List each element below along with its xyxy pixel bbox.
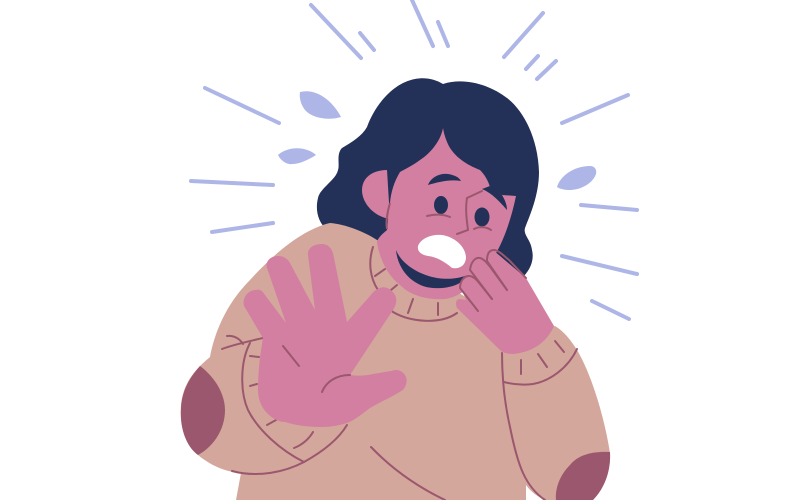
face [377, 128, 516, 299]
sweat drops [278, 91, 596, 190]
ear [362, 170, 390, 219]
eye creases and nose line [427, 191, 491, 234]
mouth [396, 250, 468, 288]
shock rays [191, 0, 637, 319]
eyes [434, 196, 490, 226]
hair [317, 78, 539, 300]
sweater seams [222, 247, 577, 500]
teeth [418, 235, 466, 268]
gap between torso and arm [526, 485, 545, 500]
eyebrow [428, 174, 461, 185]
cheek line [387, 203, 390, 229]
elbow patch: left [181, 366, 225, 455]
sweater body and arms [181, 223, 610, 500]
right hand finger lines [460, 250, 526, 311]
left hand creases [283, 346, 350, 392]
right hand [456, 250, 554, 354]
fringe lock [482, 186, 507, 210]
left raised hand [244, 244, 407, 427]
elbow patch: right [556, 452, 610, 500]
